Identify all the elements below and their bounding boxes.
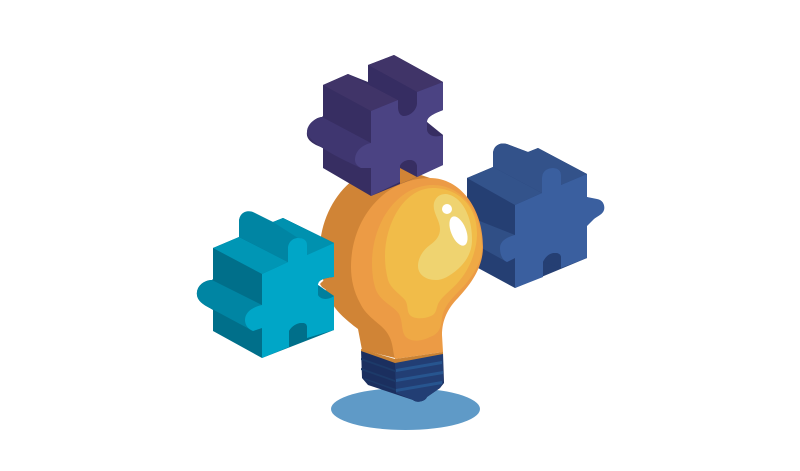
light bulb: [320, 168, 483, 359]
bulb socket: [361, 349, 444, 402]
bulb: white glint large: [446, 214, 471, 248]
bulb: inner glass: [385, 188, 477, 318]
puzzle piece: purple: [307, 55, 443, 196]
puzzle piece: teal: [197, 211, 334, 358]
bulb: highlight: [418, 194, 472, 280]
bulb: white glint small: [442, 204, 452, 214]
bulb: dark back side: [320, 168, 440, 358]
ground shadow: [331, 388, 480, 430]
bulb: outer glass: [351, 178, 483, 359]
puzzle piece: blue: [467, 143, 604, 288]
bulb: middle glass: [372, 185, 482, 341]
